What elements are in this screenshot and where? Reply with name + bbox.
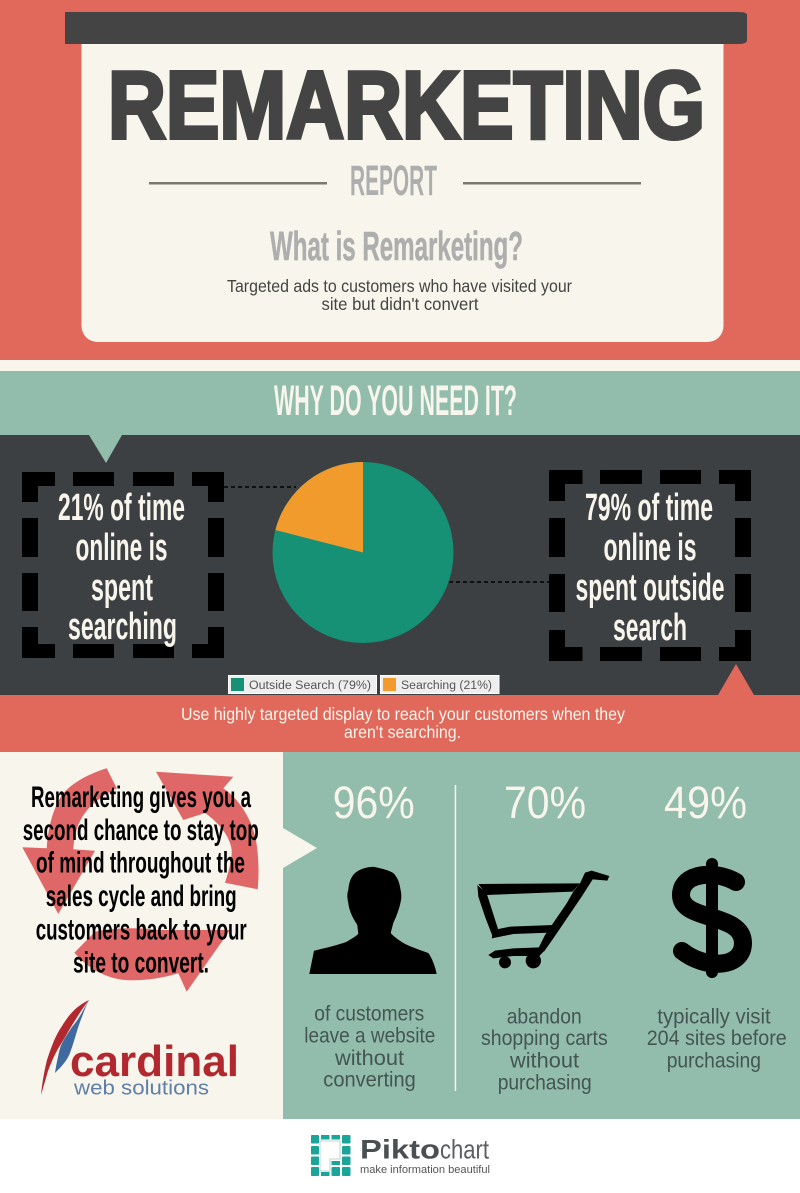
statistic: 96 percent: 96% (333, 777, 415, 828)
statistic description (481, 1005, 608, 1094)
statistic: 96 percent (304, 777, 437, 1092)
statistic: 49 percent: 49% (664, 777, 747, 828)
statistic description: 204 sites before (647, 1027, 787, 1050)
statistic description: converting (323, 1069, 416, 1092)
pointer: cream (283, 828, 317, 868)
icon: shopping cart (477, 871, 609, 968)
panel: targeted display banner (0, 664, 800, 752)
second chance text (23, 781, 259, 979)
pointer: red (718, 664, 754, 695)
callout: 21 percent: searching (68, 606, 177, 648)
pointer: teal (89, 435, 122, 463)
callout: 21 percent: online is (76, 527, 168, 569)
heading: what is remarketing: What is Remarketing? (270, 223, 523, 269)
logo: cardinal web solutions: cardinal (70, 1037, 239, 1086)
statistic description: without (509, 1049, 579, 1072)
statistic description: of customers (314, 1003, 424, 1026)
statistic description: abandon (507, 1005, 582, 1028)
icon: piktochart mark (311, 1135, 350, 1176)
subtitle: report: REPORT (350, 158, 437, 205)
statistic description: without (334, 1047, 404, 1070)
statistic description: shopping carts (481, 1027, 608, 1050)
header top bar (65, 12, 747, 44)
chart legend: Outside Search (79%) (249, 680, 371, 692)
logo: piktochart (311, 1134, 490, 1176)
statistic: 70 percent (477, 777, 609, 1094)
second chance text: sales cycle and bring (46, 880, 237, 913)
icon: person (309, 867, 437, 974)
statistic description: purchasing (498, 1071, 592, 1094)
second chance text: of mind throughout the (36, 847, 245, 880)
second chance text: customers back to your (36, 913, 247, 946)
statistic: 70 percent: 70% (504, 777, 586, 828)
icon: dollar sign (681, 864, 743, 972)
icon: recycle arrows (22, 768, 259, 992)
heading: why do you need it: WHY DO YOU NEED IT? (274, 378, 517, 425)
logo: cardinal web solutions: web solutions (73, 1076, 209, 1099)
second chance text: Remarketing gives you a (31, 781, 251, 814)
statistic description: leave a website (304, 1025, 435, 1048)
callout: 79 percent: online is (604, 527, 696, 569)
definition text: site but didn't convert (322, 294, 479, 314)
panel: second chance (0, 752, 283, 1119)
logo: cardinal web solutions (41, 1000, 239, 1099)
statistic description: purchasing (667, 1049, 761, 1072)
logo: piktochart: chart (440, 1134, 489, 1164)
second chance text: site to convert. (73, 946, 209, 979)
banner text (181, 704, 625, 742)
statistic description: typically visit (657, 1005, 771, 1028)
banner text: aren't searching. (344, 722, 461, 742)
panel: statistics (283, 752, 800, 1119)
statistic: 49 percent (647, 777, 787, 1072)
definition text (227, 276, 572, 314)
header card (82, 44, 724, 342)
callout: 21 percent: 21% of time (58, 487, 185, 529)
definition text: Targeted ads to customers who have visited your (227, 276, 572, 296)
panel: header (0, 0, 800, 360)
callout: 79 percent: search (613, 607, 687, 649)
callout: 79 percent: 79% of time (585, 487, 713, 529)
callout: 21 percent: spent (91, 567, 153, 609)
second chance text: second chance to stay top (23, 814, 259, 847)
callout: 79 percent (549, 470, 751, 661)
pie chart (272, 462, 454, 643)
logo: piktochart: make information beautiful (360, 1164, 490, 1176)
callout: 21 percent (22, 472, 224, 658)
chart legend (228, 676, 499, 694)
banner text: Use highly targeted display to reach your customers when they (181, 704, 625, 724)
statistic description (647, 1005, 787, 1072)
panel: pie chart section (0, 435, 800, 695)
panel: why do you need it (0, 371, 800, 435)
statistic description (304, 1003, 435, 1092)
chart legend: Searching (21%) (401, 680, 492, 692)
logo: piktochart: Pikto (360, 1134, 440, 1164)
